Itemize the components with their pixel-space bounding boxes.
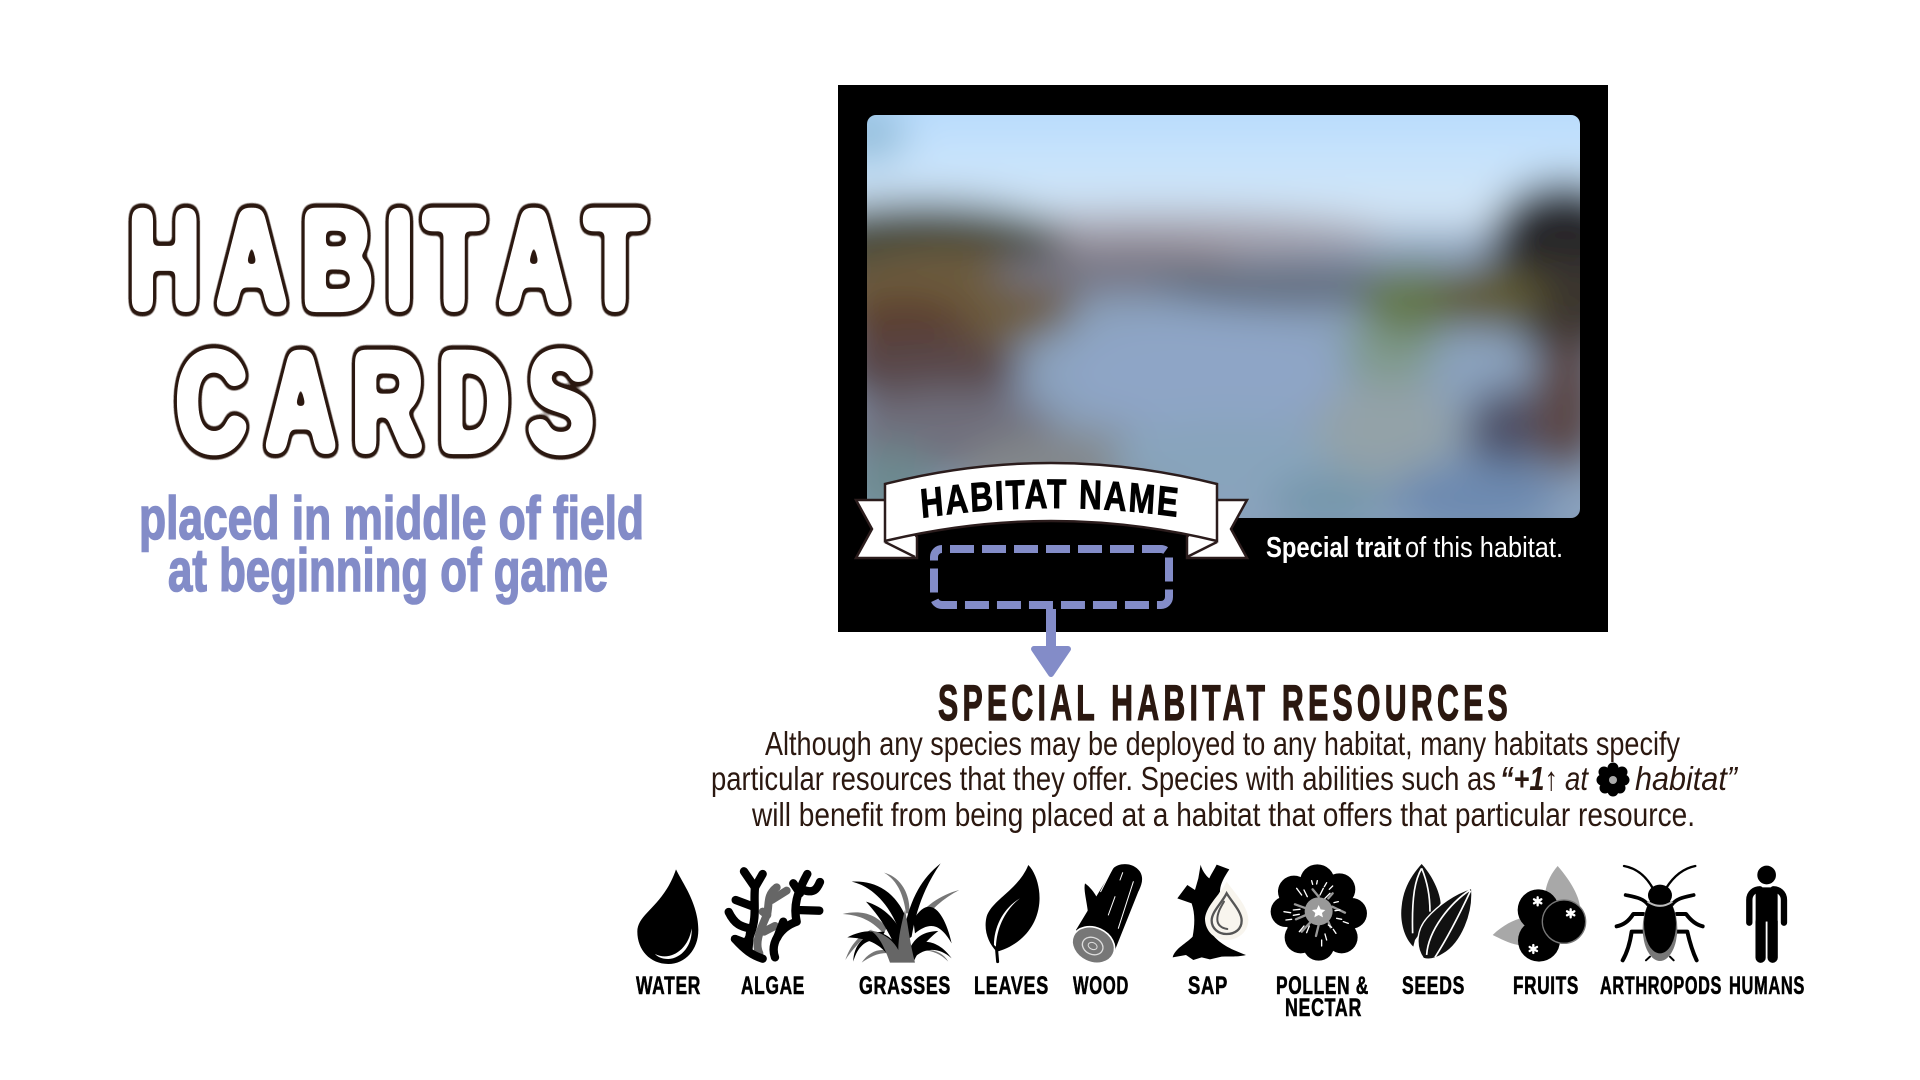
icon: grasses [843,863,959,963]
description text: habitat” [1635,760,1739,797]
icon: fruits [1493,866,1586,962]
ribbon banner [856,463,1247,558]
title line: CARDS: CARDS [176,324,593,480]
arrow [1034,609,1068,674]
card background [838,85,1608,632]
dashed resource box [934,549,1169,605]
icon labels: HUMANS [1729,972,1805,1000]
icon labels: POLLEN & [1276,972,1369,1000]
icon labels: NECTAR [1285,994,1362,1022]
icon: seeds [1401,864,1472,959]
panel: habitat card [838,85,1608,632]
icon labels: WOOD [1073,972,1129,1000]
icon labels: ALGAE [741,972,805,1000]
description text: “+1↑ [1500,760,1558,797]
icon: wood [1066,864,1142,970]
icon labels: GRASSES [859,972,951,1000]
title: Habitat Cards [129,182,645,480]
description text [711,725,1739,833]
description text: at [1565,760,1590,797]
icon: inline flower [1596,762,1630,796]
icon labels: ARTHROPODS [1600,972,1722,1000]
icon labels: SAP [1188,972,1228,1000]
ribbon text: HABITAT NAME [921,479,1178,518]
icon labels: LEAVES [974,972,1049,1000]
icon labels: WATER [636,972,701,1000]
heading: special habitat resources: SPECIAL HABITAT RESOURCES [938,675,1512,731]
icon: algae [729,871,820,959]
description text: Although any species may be deployed to any habitat, many habitats specify [765,725,1680,762]
subtitle [139,485,644,604]
icon labels: SEEDS [1402,972,1465,1000]
description text: will benefit from being placed at a habitat that offers that particular resource. [751,796,1695,833]
special trait text: of this habitat. [1405,532,1563,564]
blurred habitat photo [867,115,1580,518]
icon: leaves [986,865,1040,962]
title line: HABITAT: HABITAT [129,182,645,338]
icon: arthropods [1617,866,1703,961]
icon: sap [1173,865,1248,960]
subtitle: at beginning of game [168,537,608,604]
resource icons row [637,863,1784,970]
icon: water [637,869,698,964]
special trait text: Special trait [1266,532,1401,564]
icon labels: FRUITS [1513,972,1579,1000]
icon labels [636,972,1805,1022]
description text: particular resources that they offer. Species with abilities such as [711,760,1496,797]
icon: pollen and nectar [1271,864,1367,961]
subtitle: placed in middle of field [139,485,644,552]
icon: humans [1749,866,1784,963]
